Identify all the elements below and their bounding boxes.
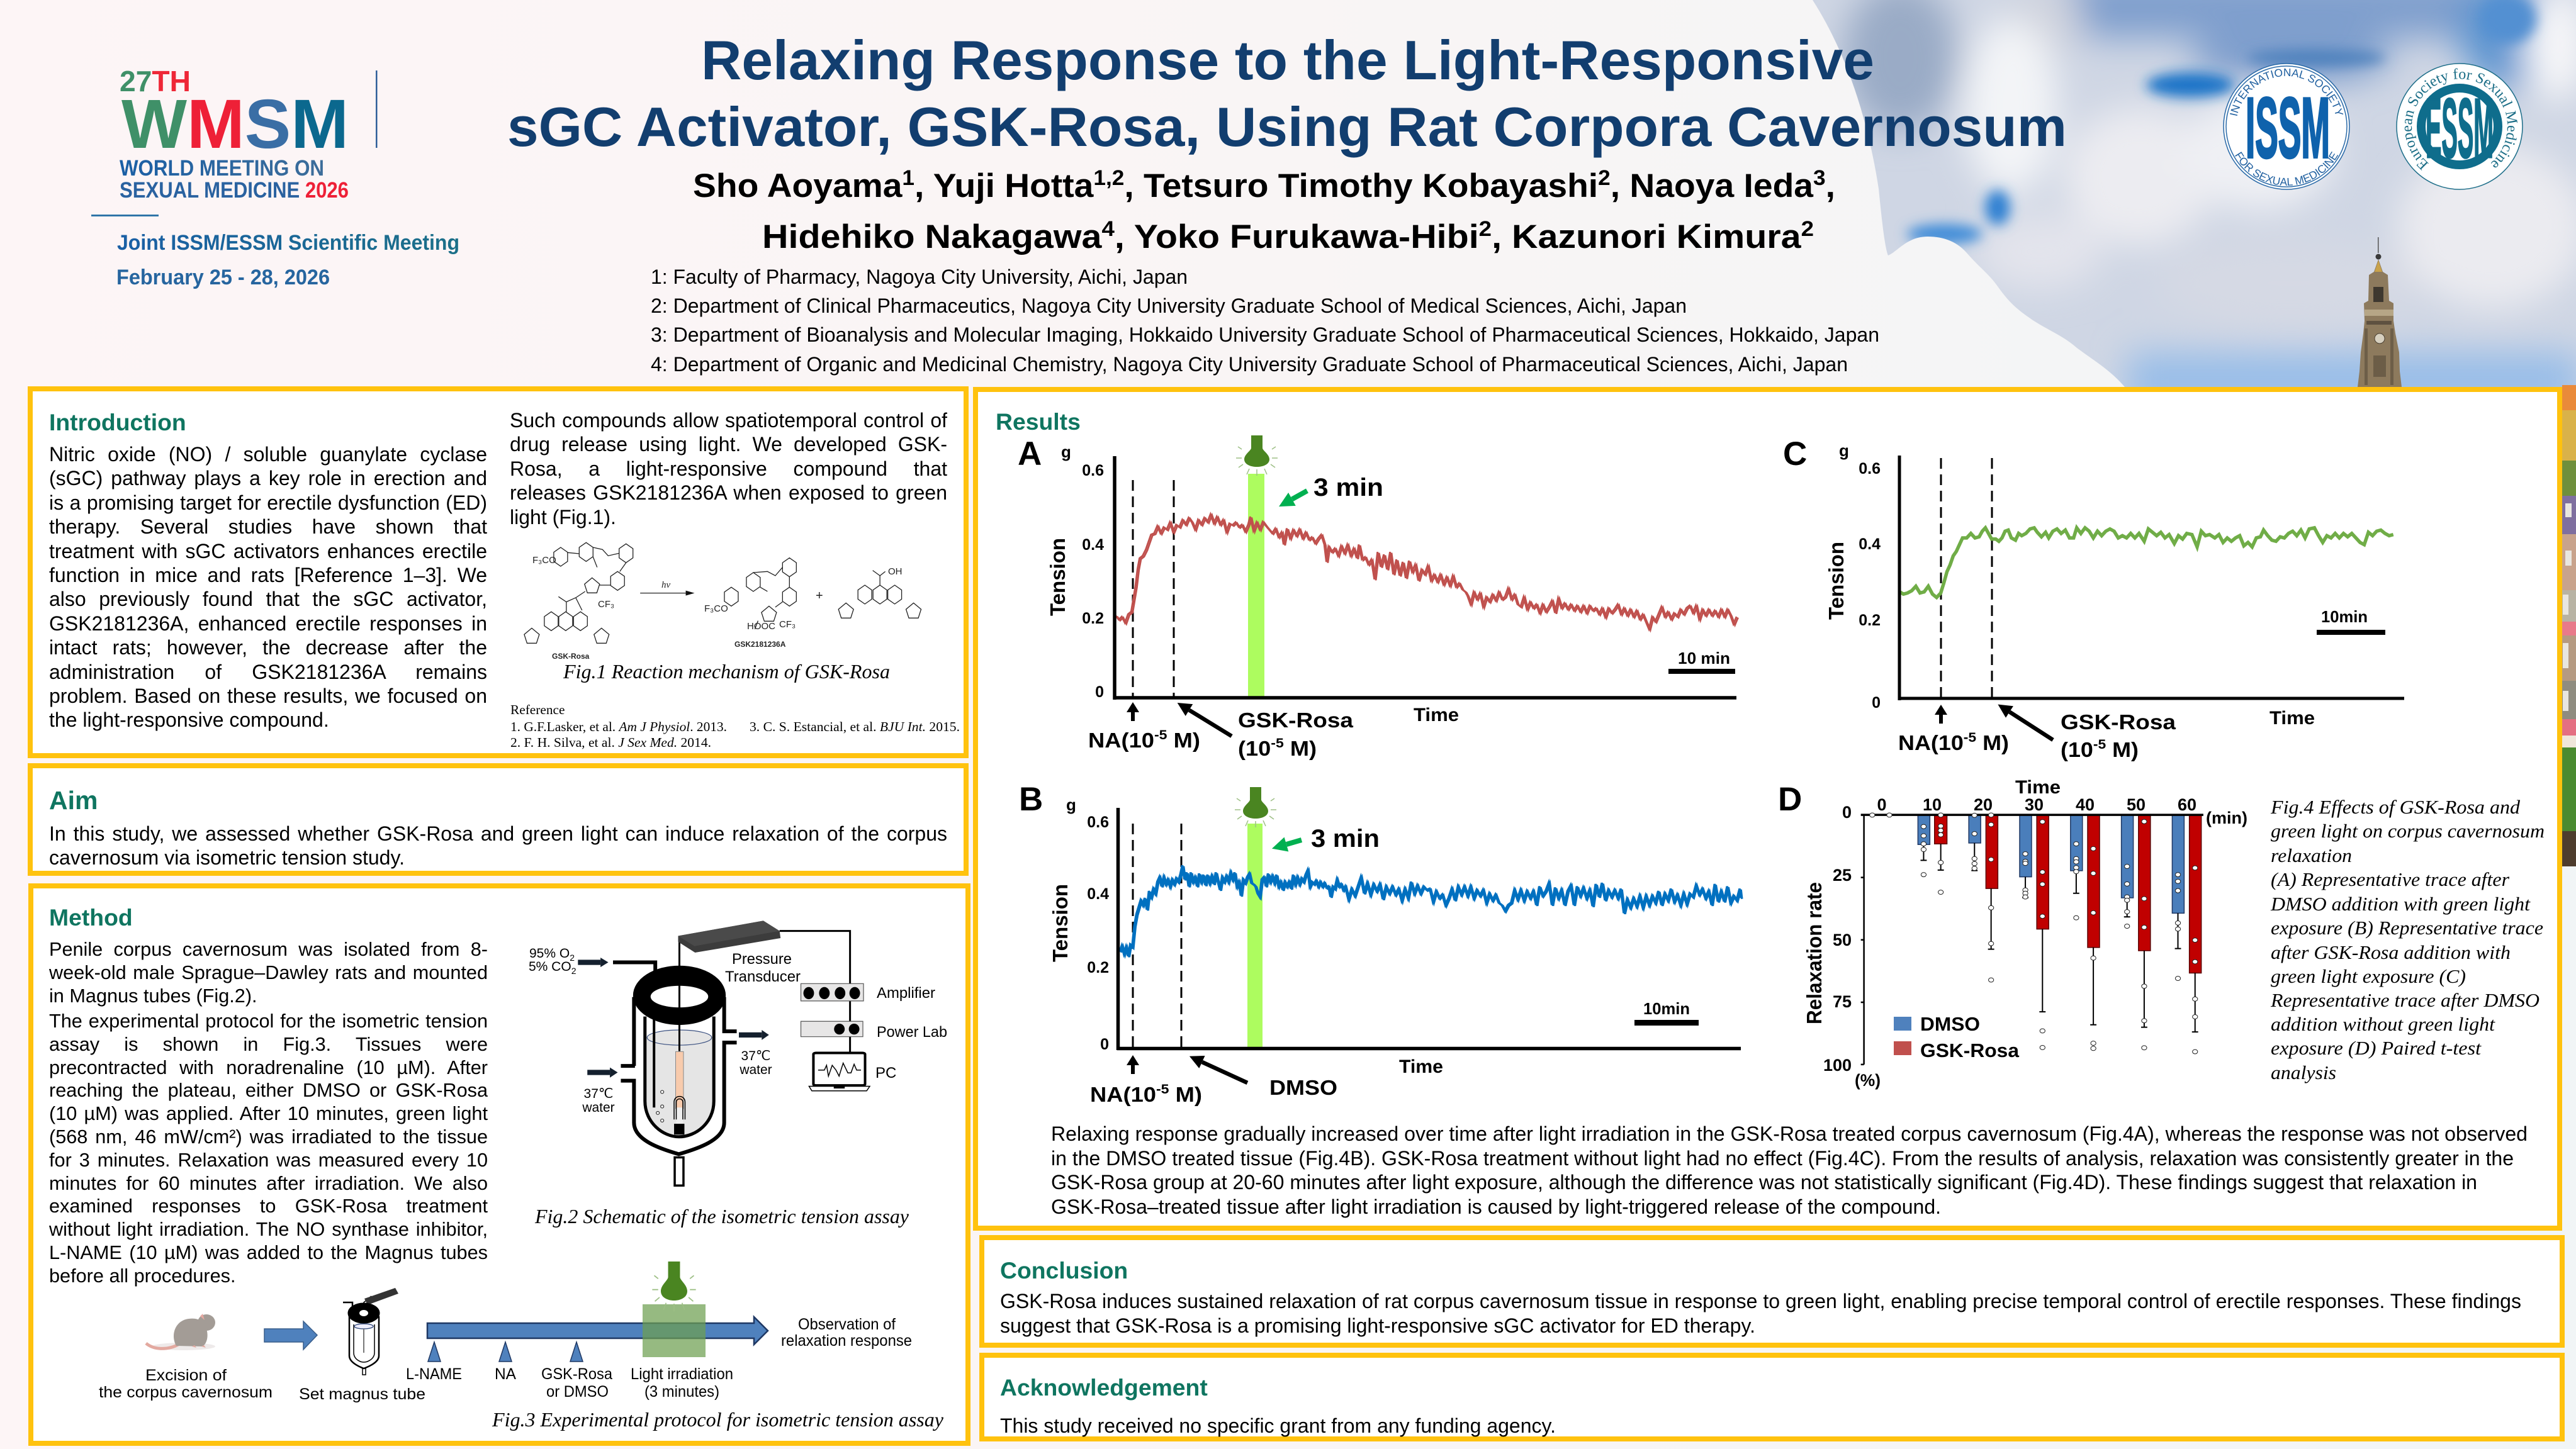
text block: aim: In this study, we assessed whether GSK-Rosa and green light can induce relaxation of the corpus bbox=[49, 822, 947, 845]
chart A: GSK-Rosa with light trace: GSK-Rosa bbox=[1238, 708, 1354, 732]
logo: 27th WMSM: SEXUAL MEDICINE 2026 bbox=[120, 178, 349, 203]
text block: introduction left column: treatment with sGC activators enhances erectile bbox=[49, 540, 487, 562]
chart B: DMSO with light trace: Tension bbox=[1049, 884, 1072, 962]
chart D: relaxation rate bar chart: (min) bbox=[2206, 808, 2247, 827]
figure 1: reaction mechanism structures: hv bbox=[661, 580, 671, 590]
text block: introduction left column: function in mice and rats [Reference 1–3]. We bbox=[49, 564, 487, 586]
chart B: DMSO with light trace: Time bbox=[1399, 1056, 1443, 1077]
chart D: relaxation rate bar chart: 50 bbox=[1833, 931, 1852, 949]
chart A: GSK-Rosa with light trace: 0.6 bbox=[1082, 462, 1104, 479]
text block: method paragraph 2: minutes for 60 minutes after irradiation. We also bbox=[49, 1173, 488, 1194]
text block: introduction left column: GSK2181236A, enhanced erectile responses in bbox=[49, 612, 487, 635]
caption: figure 4: exposure (B) Representative trace bbox=[2271, 917, 2543, 939]
chart A: GSK-Rosa with light trace: -5 bbox=[1271, 736, 1284, 751]
heading: conclusion: Conclusion bbox=[1000, 1257, 1128, 1284]
text block: aim: cavernosum via isometric tension study. bbox=[49, 846, 405, 869]
legend bbox=[1894, 1013, 2020, 1061]
caption: figure 4: analysis bbox=[2271, 1061, 2336, 1083]
logo: ISSM: FOR SEXUAL MEDICINE bbox=[2235, 151, 2339, 186]
chart D: relaxation rate bar chart: 30 bbox=[2025, 795, 2044, 814]
caption: figure 4: exposure (D) Paired t-test bbox=[2271, 1037, 2482, 1059]
text block: introduction left column bbox=[49, 442, 487, 738]
chart D: relaxation rate bar chart: 40 bbox=[2076, 795, 2095, 814]
text block: results summary: in the DMSO treated tissue (Fig.4B). GSK-Rosa treatment without light had no effect (Fig.4C). From the results of analysis, relaxation was consistently greater in the bbox=[1051, 1147, 2514, 1170]
background: sky photograph bbox=[1794, 0, 2576, 409]
chart A: GSK-Rosa with light trace: 0 bbox=[1095, 683, 1104, 701]
protocol labels: L-NAME bbox=[406, 1365, 462, 1383]
text block: introduction left column: therapy. Several studies have shown that bbox=[49, 515, 487, 538]
text block: method paragraph 2: (10 µM) was applied. After 10 minutes, green light bbox=[49, 1103, 488, 1124]
text block: results summary: GSK-Rosa–treated tissue after light irradiation is caused by light-triggered release of the compound. bbox=[1051, 1195, 1941, 1218]
icon: rat bbox=[146, 1314, 215, 1350]
protocol labels: or DMSO bbox=[546, 1383, 609, 1401]
text block: introduction left column: administration of GSK2181236A remains bbox=[49, 661, 487, 683]
chart B: DMSO with light trace: B bbox=[1019, 781, 1043, 818]
figure 2: magnus tube schematic: Amplifier bbox=[877, 985, 935, 1002]
text block: introduction left column: intact rats; however, the decrease after the bbox=[49, 636, 487, 659]
protocol labels: NA bbox=[495, 1365, 516, 1383]
chart C: GSK-Rosa without light trace: Time bbox=[2269, 708, 2315, 729]
light irradiation block bbox=[643, 1304, 706, 1357]
chart A: GSK-Rosa with light trace: M) bbox=[1167, 729, 1200, 752]
chart D: relaxation rate bar chart: 75 bbox=[1833, 992, 1852, 1011]
chart B: DMSO with light trace: 10min bbox=[1643, 999, 1690, 1018]
caption: figure 4: DMSO addition with green light bbox=[2270, 893, 2531, 915]
figure 1: reaction mechanism structures: CF₃ bbox=[779, 619, 796, 630]
figure 1: reaction mechanism structures: GSK-Rosa bbox=[552, 652, 590, 661]
figure 1: reaction mechanism structures: F₃CO bbox=[532, 555, 556, 566]
chart B: DMSO with light trace: 0.2 bbox=[1087, 959, 1109, 976]
text block: results summary: Relaxing response gradually increased over time after light irradiation in the GSK-Rosa treated corpus cavernosum (Fig.4A), whereas the response was not observed bbox=[1051, 1122, 2528, 1145]
authors: 1 bbox=[902, 166, 914, 190]
caption: figure 4: Fig.4 Effects of GSK-Rosa and bbox=[2270, 796, 2521, 818]
chart D: relaxation rate bar chart: (%) bbox=[1855, 1071, 1881, 1090]
text block: method paragraph 2: for 3 minutes. Relaxation was measured every 10 bbox=[49, 1150, 488, 1171]
text block: introduction left column: Nitric oxide (NO) / soluble guanylate cyclase bbox=[49, 443, 487, 466]
authors: , Kazunori Kimura bbox=[1492, 218, 1801, 255]
icon: green light bulb bbox=[652, 1262, 696, 1311]
figure 1: reaction mechanism structures: OH bbox=[888, 566, 903, 577]
text block: method paragraph 2: examined responses to GSK-Rosa treatment bbox=[49, 1195, 488, 1217]
chart B: DMSO with light trace: g bbox=[1066, 795, 1076, 814]
figure 1: reaction mechanism structures bbox=[524, 542, 921, 661]
chart A: GSK-Rosa with light trace: A bbox=[1018, 435, 1042, 473]
title bbox=[507, 29, 2067, 158]
figure 3: experimental protocol bbox=[99, 1262, 912, 1403]
text block: method paragraph 2: L-NAME (10 µM) was added to the Magnus tubes bbox=[49, 1242, 488, 1263]
text block: introduction left column: also previously found that the sGC activator, bbox=[49, 588, 487, 610]
protocol labels bbox=[99, 1316, 912, 1403]
chart A: GSK-Rosa with light trace: M) bbox=[1284, 737, 1317, 760]
logo: 27th WMSM bbox=[91, 65, 459, 289]
authors: 2 bbox=[1801, 217, 1814, 241]
caption: figure 4 bbox=[2270, 796, 2545, 1083]
chart C: GSK-Rosa without light trace: M) bbox=[1976, 731, 2009, 754]
text block: introduction right column: releases GSK2181236A when exposed to green bbox=[510, 481, 947, 504]
panel: results bbox=[976, 389, 2560, 1228]
figure 2: magnus tube schematic: Power Lab bbox=[877, 1024, 947, 1041]
authors: , Yuji Hotta bbox=[914, 167, 1094, 204]
protocol labels: Light irradiation bbox=[631, 1365, 733, 1383]
text block: conclusion: GSK-Rosa induces sustained relaxation of rat corpus cavernosum tissue in response to green light, enabling precise temporal control of erectile responses. These findings bbox=[1000, 1290, 2521, 1312]
authors: , bbox=[1826, 167, 1835, 204]
legend: DMSO bbox=[1920, 1013, 1980, 1035]
chart D: relaxation rate bar chart: 25 bbox=[1833, 866, 1852, 885]
reference list: 3. C. S. Estancial, et al. BJU Int. 2015. bbox=[750, 719, 960, 734]
authors: Hidehiko Nakagawa bbox=[762, 218, 1077, 255]
chart A: GSK-Rosa with light trace: 10 min bbox=[1678, 649, 1730, 668]
chart C: GSK-Rosa without light trace: M) bbox=[2106, 738, 2139, 761]
authors: , Yoko Furukawa-Hibi bbox=[1115, 218, 1479, 255]
chart D: relaxation rate bar chart: 0 bbox=[1842, 803, 1852, 822]
text block: introduction right column bbox=[510, 408, 947, 534]
chart D: relaxation rate bar chart: D bbox=[1778, 781, 1802, 818]
chart C: GSK-Rosa without light trace bbox=[1783, 435, 2404, 761]
chart C: GSK-Rosa without light trace: -5 bbox=[2093, 737, 2106, 752]
text block: introduction left column: (sGC) pathway plays a key role in erection and bbox=[49, 467, 487, 490]
chart C: GSK-Rosa without light trace: 0.4 bbox=[1859, 535, 1881, 553]
caption: figure 4: green light on corpus cavernosum bbox=[2271, 820, 2545, 842]
logo: ESSM: European Society for Sexual Medicine bbox=[2404, 68, 2517, 171]
figure 1: reaction mechanism structures: + bbox=[816, 589, 823, 603]
figure 2: magnus tube schematic: 95% O bbox=[529, 946, 570, 961]
chart C: GSK-Rosa without light trace: 10min bbox=[2321, 607, 2368, 626]
figure 1: reaction mechanism structures: HOOC bbox=[747, 621, 775, 632]
chart C: GSK-Rosa without light trace: 0.6 bbox=[1859, 460, 1881, 478]
authors bbox=[693, 166, 1835, 255]
chart A: GSK-Rosa with light trace: 3 min bbox=[1313, 474, 1383, 501]
text block: introduction left column: is a promising target for erectile dysfunction (ED) bbox=[49, 491, 487, 514]
chart C: GSK-Rosa without light trace: Tension bbox=[1825, 542, 1848, 620]
authors: 1,2 bbox=[1093, 166, 1124, 190]
text block: method paragraph 2: assay is shown in Fig.3. Tissues were bbox=[49, 1034, 488, 1055]
reference list: 1. G.F.Lasker, et al. Am J Physiol. 2013. bbox=[510, 719, 727, 734]
chart C: GSK-Rosa without light trace: g bbox=[1839, 441, 1849, 460]
chart D: relaxation rate bar chart: Time bbox=[2015, 777, 2061, 798]
logo: 27th WMSM: Joint ISSM/ESSM Scientific Meeting bbox=[117, 231, 459, 255]
caption: figure 4: Representative trace after DMSO bbox=[2270, 989, 2539, 1011]
panel: method bbox=[31, 886, 968, 1443]
text block: method paragraph 2: The experimental protocol for the isometric tension bbox=[49, 1010, 488, 1032]
figure 1: reaction mechanism structures: CF₃ bbox=[598, 599, 614, 610]
authors: 2 bbox=[1598, 166, 1611, 190]
logo: ISSM: INTERNATIONAL SOCIETY bbox=[2230, 68, 2344, 116]
protocol labels: Set magnus tube bbox=[299, 1385, 425, 1403]
chart A: GSK-Rosa with light trace: NA(10 bbox=[1088, 729, 1148, 752]
affiliations bbox=[651, 266, 1879, 376]
timeline markers bbox=[428, 1342, 583, 1362]
text block: introduction right column: Rosa, a light-responsive compound that bbox=[510, 457, 947, 480]
chart A: GSK-Rosa with light trace: g bbox=[1061, 442, 1071, 461]
figure 2: magnus tube schematic bbox=[529, 920, 947, 1185]
chart C: GSK-Rosa without light trace: 0 bbox=[1872, 694, 1881, 712]
affiliations: 3: Department of Bioanalysis and Molecular Imaging, Hokkaido University Graduate School of Pharmaceutical Sciences, Hokkaido, Japan bbox=[651, 323, 1879, 346]
chart B: DMSO with light trace: 3 min bbox=[1311, 825, 1380, 853]
text block: method paragraph 2: before all procedures. bbox=[49, 1265, 236, 1287]
text block: method paragraph 2: (568 nm, 46 mW/cm²) was irradiated to the tissue bbox=[49, 1126, 488, 1148]
authors: , Naoya Ieda bbox=[1611, 167, 1813, 204]
heading: results: Results bbox=[996, 408, 1081, 435]
chart B: DMSO with light trace: 0 bbox=[1100, 1036, 1109, 1053]
text block: introduction left column: the light-responsive compound. bbox=[49, 708, 329, 731]
text block: results summary: GSK-Rosa group at 20-60 minutes after light exposure, although the difference was not statistically significant (Fig.4D). These findings suggest that relaxation in bbox=[1051, 1171, 2477, 1194]
text block: method paragraph 2 bbox=[49, 1010, 488, 1290]
caption: figure 2: Fig.2 Schematic of the isometric tension assay bbox=[534, 1205, 909, 1228]
protocol labels: Observation of bbox=[798, 1316, 896, 1333]
figure 2: magnus tube schematic: 37℃ bbox=[584, 1087, 613, 1101]
chart C: GSK-Rosa without light trace: NA(10 bbox=[1898, 731, 1958, 754]
affiliations: 4: Department of Organic and Medicinal Chemistry, Nagoya City University Graduate School of Pharmaceutical Sciences, Aichi, Japan bbox=[651, 353, 1848, 376]
figure 2: magnus tube schematic: 5% CO bbox=[529, 959, 571, 974]
chart C: GSK-Rosa without light trace: -5 bbox=[1964, 730, 1976, 745]
authors: , Tetsuro Timothy Kobayashi bbox=[1124, 167, 1598, 204]
affiliations: 1: Faculty of Pharmacy, Nagoya City University, Aichi, Japan bbox=[651, 266, 1188, 288]
background: colourful houses strip bbox=[2562, 385, 2576, 866]
chart B: DMSO with light trace: M) bbox=[1169, 1083, 1202, 1106]
chart D: relaxation rate bar chart: 100 bbox=[1823, 1056, 1852, 1075]
chart C: GSK-Rosa without light trace: 0.2 bbox=[1859, 612, 1881, 629]
chart A: GSK-Rosa with light trace: Time bbox=[1414, 705, 1459, 725]
caption: figure 1: Fig.1 Reaction mechanism of GSK-Rosa bbox=[563, 660, 890, 683]
figure 2: magnus tube schematic: Pressure bbox=[732, 951, 792, 968]
reference list bbox=[510, 702, 960, 750]
figure 2: magnus tube schematic: water bbox=[739, 1063, 772, 1077]
protocol labels: GSK-Rosa bbox=[541, 1365, 612, 1383]
chart B: DMSO with light trace: NA(10 bbox=[1090, 1083, 1150, 1106]
chart A: GSK-Rosa with light trace: (10 bbox=[1238, 737, 1268, 760]
chart A: GSK-Rosa with light trace bbox=[1018, 435, 1738, 760]
figure 2: magnus tube schematic: water bbox=[582, 1100, 615, 1115]
figure 2: magnus tube schematic: Transducer bbox=[725, 968, 801, 985]
text block: conclusion bbox=[1000, 1290, 2521, 1337]
caption: figure 4: (A) Representative trace after bbox=[2271, 868, 2510, 890]
text block: aim bbox=[49, 822, 947, 872]
text block: method paragraph 2: reaching the plateau, either DMSO or GSK-Rosa bbox=[49, 1080, 488, 1101]
figure 2: magnus tube schematic: 2 bbox=[570, 953, 575, 963]
chart D: relaxation rate bar chart bbox=[1778, 777, 2247, 1090]
chart A: GSK-Rosa with light trace: 0.4 bbox=[1082, 536, 1104, 554]
authors: 2 bbox=[1479, 217, 1492, 241]
text block: introduction right column: drug release using light. We developed GSK- bbox=[510, 433, 947, 456]
chart C: GSK-Rosa without light trace: (10 bbox=[2061, 738, 2091, 761]
reference list: Reference bbox=[510, 702, 565, 717]
text block: method paragraph 1: week-old male Sprague–Dawley rats and mounted bbox=[49, 962, 488, 983]
background: church tower bbox=[2358, 237, 2402, 387]
text: ISSM bbox=[2246, 80, 2330, 176]
logo: 27th WMSM: WMSM bbox=[121, 86, 349, 163]
figure 2: magnus tube schematic: 37℃ bbox=[741, 1049, 770, 1063]
legend: GSK-Rosa bbox=[1920, 1039, 2020, 1061]
chart B: DMSO with light trace: DMSO bbox=[1269, 1076, 1337, 1099]
text block: method paragraph 1 bbox=[49, 938, 488, 1009]
text block: method paragraph 1: in Magnus tubes (Fig.2). bbox=[49, 985, 257, 1007]
text block: method paragraph 1: Penile corpus cavernosum was isolated from 8- bbox=[49, 939, 488, 960]
figure 1: reaction mechanism structures: GSK2181236A bbox=[734, 640, 786, 649]
arrow: timeline bbox=[427, 1317, 768, 1345]
figure 1: reaction mechanism structures: F₃CO bbox=[704, 603, 728, 614]
chart A: GSK-Rosa with light trace: 0.2 bbox=[1082, 610, 1104, 627]
text block: method paragraph 2: precontracted with noradrenaline (10 µM). After bbox=[49, 1057, 488, 1078]
logo: 27th WMSM: February 25 - 28, 2026 bbox=[116, 266, 330, 289]
panel: introduction bbox=[30, 389, 966, 756]
heading: aim: Aim bbox=[49, 786, 98, 815]
title: Relaxing Response to the Light-Responsive bbox=[701, 29, 1874, 91]
chart B: DMSO with light trace: -5 bbox=[1156, 1082, 1169, 1097]
caption: figure 3: Fig.3 Experimental protocol for isometric tension assay bbox=[492, 1408, 944, 1431]
logo: ISSM bbox=[2223, 63, 2350, 190]
protocol labels: Excision of bbox=[145, 1367, 227, 1384]
panel: conclusion bbox=[982, 1238, 2562, 1345]
authors: 4 bbox=[1102, 217, 1115, 241]
heading: method: Method bbox=[49, 904, 133, 931]
text block: introduction left column: problem. Based on these results, we focused on bbox=[49, 685, 487, 707]
reference list: 2. F. H. Silva, et al. J Sex Med. 2014. bbox=[510, 735, 711, 750]
chart D: relaxation rate bar chart: 10 bbox=[1923, 795, 1942, 814]
text block: results summary bbox=[1051, 1122, 2528, 1218]
caption: figure 4: after GSK-Rosa addition with bbox=[2271, 941, 2511, 963]
figure 2: magnus tube schematic: 2 bbox=[571, 966, 577, 976]
panel: aim bbox=[30, 766, 966, 873]
authors: Sho Aoyama bbox=[693, 167, 895, 204]
affiliations: 2: Department of Clinical Pharmaceutics, Nagoya City University Graduate School of Medical Sciences, Aichi, Japan bbox=[651, 294, 1687, 317]
text block: introduction right column: light (Fig.1). bbox=[510, 506, 616, 529]
caption: figure 4: addition without green light bbox=[2271, 1013, 2495, 1035]
authors: 3 bbox=[1813, 166, 1826, 190]
arrow: to magnus tube bbox=[264, 1321, 317, 1350]
chart D: relaxation rate bar chart: 50 bbox=[2127, 795, 2146, 814]
text block: introduction right column: Such compounds allow spatiotemporal control of bbox=[510, 409, 947, 432]
chart B: DMSO with light trace bbox=[1019, 781, 1742, 1106]
caption: figure 4: green light exposure (C) bbox=[2271, 965, 2466, 987]
text block: conclusion: suggest that GSK-Rosa is a promising light-responsive sGC activator for ED therapy. bbox=[1000, 1314, 1755, 1337]
chart D: relaxation rate bar chart: 20 bbox=[1974, 795, 1993, 814]
chart C: GSK-Rosa without light trace: GSK-Rosa bbox=[2061, 710, 2176, 734]
chart B: DMSO with light trace: 0.4 bbox=[1087, 885, 1109, 903]
protocol labels: relaxation response bbox=[781, 1332, 912, 1350]
chart A: GSK-Rosa with light trace: -5 bbox=[1154, 728, 1167, 742]
heading: introduction: Introduction bbox=[49, 409, 186, 435]
chart A: GSK-Rosa with light trace: Tension bbox=[1046, 538, 1069, 616]
figure 2: magnus tube schematic: PC bbox=[875, 1065, 896, 1082]
protocol labels: (3 minutes) bbox=[644, 1383, 719, 1401]
text block: acknowledgement: This study received no specific grant from any funding agency. bbox=[1000, 1414, 1556, 1437]
icon: mini magnus tube bbox=[343, 1288, 398, 1375]
chart C: GSK-Rosa without light trace: C bbox=[1783, 435, 1807, 473]
caption: figure 4: relaxation bbox=[2271, 844, 2352, 866]
panel: acknowledgement bbox=[982, 1355, 2562, 1439]
chart D: relaxation rate bar chart: Relaxation rate bbox=[1803, 882, 1826, 1024]
title: sGC Activator, GSK-Rosa, Using Rat Corpora Cavernosum bbox=[507, 96, 2067, 158]
text block: method paragraph 2: without light irradiation. The NO synthase inhibitor, bbox=[49, 1219, 488, 1240]
heading: acknowledgement: Acknowledgement bbox=[1000, 1374, 1208, 1401]
logo: 27th WMSM: WORLD MEETING ON bbox=[120, 156, 324, 181]
protocol labels: the corpus cavernosum bbox=[99, 1384, 273, 1401]
logo: 27th WMSM: 27TH bbox=[120, 65, 191, 98]
chart D: relaxation rate bar chart: 0 bbox=[1877, 795, 1887, 814]
chart D: relaxation rate bar chart: 60 bbox=[2178, 795, 2196, 814]
chart B: DMSO with light trace: 0.6 bbox=[1087, 814, 1109, 831]
